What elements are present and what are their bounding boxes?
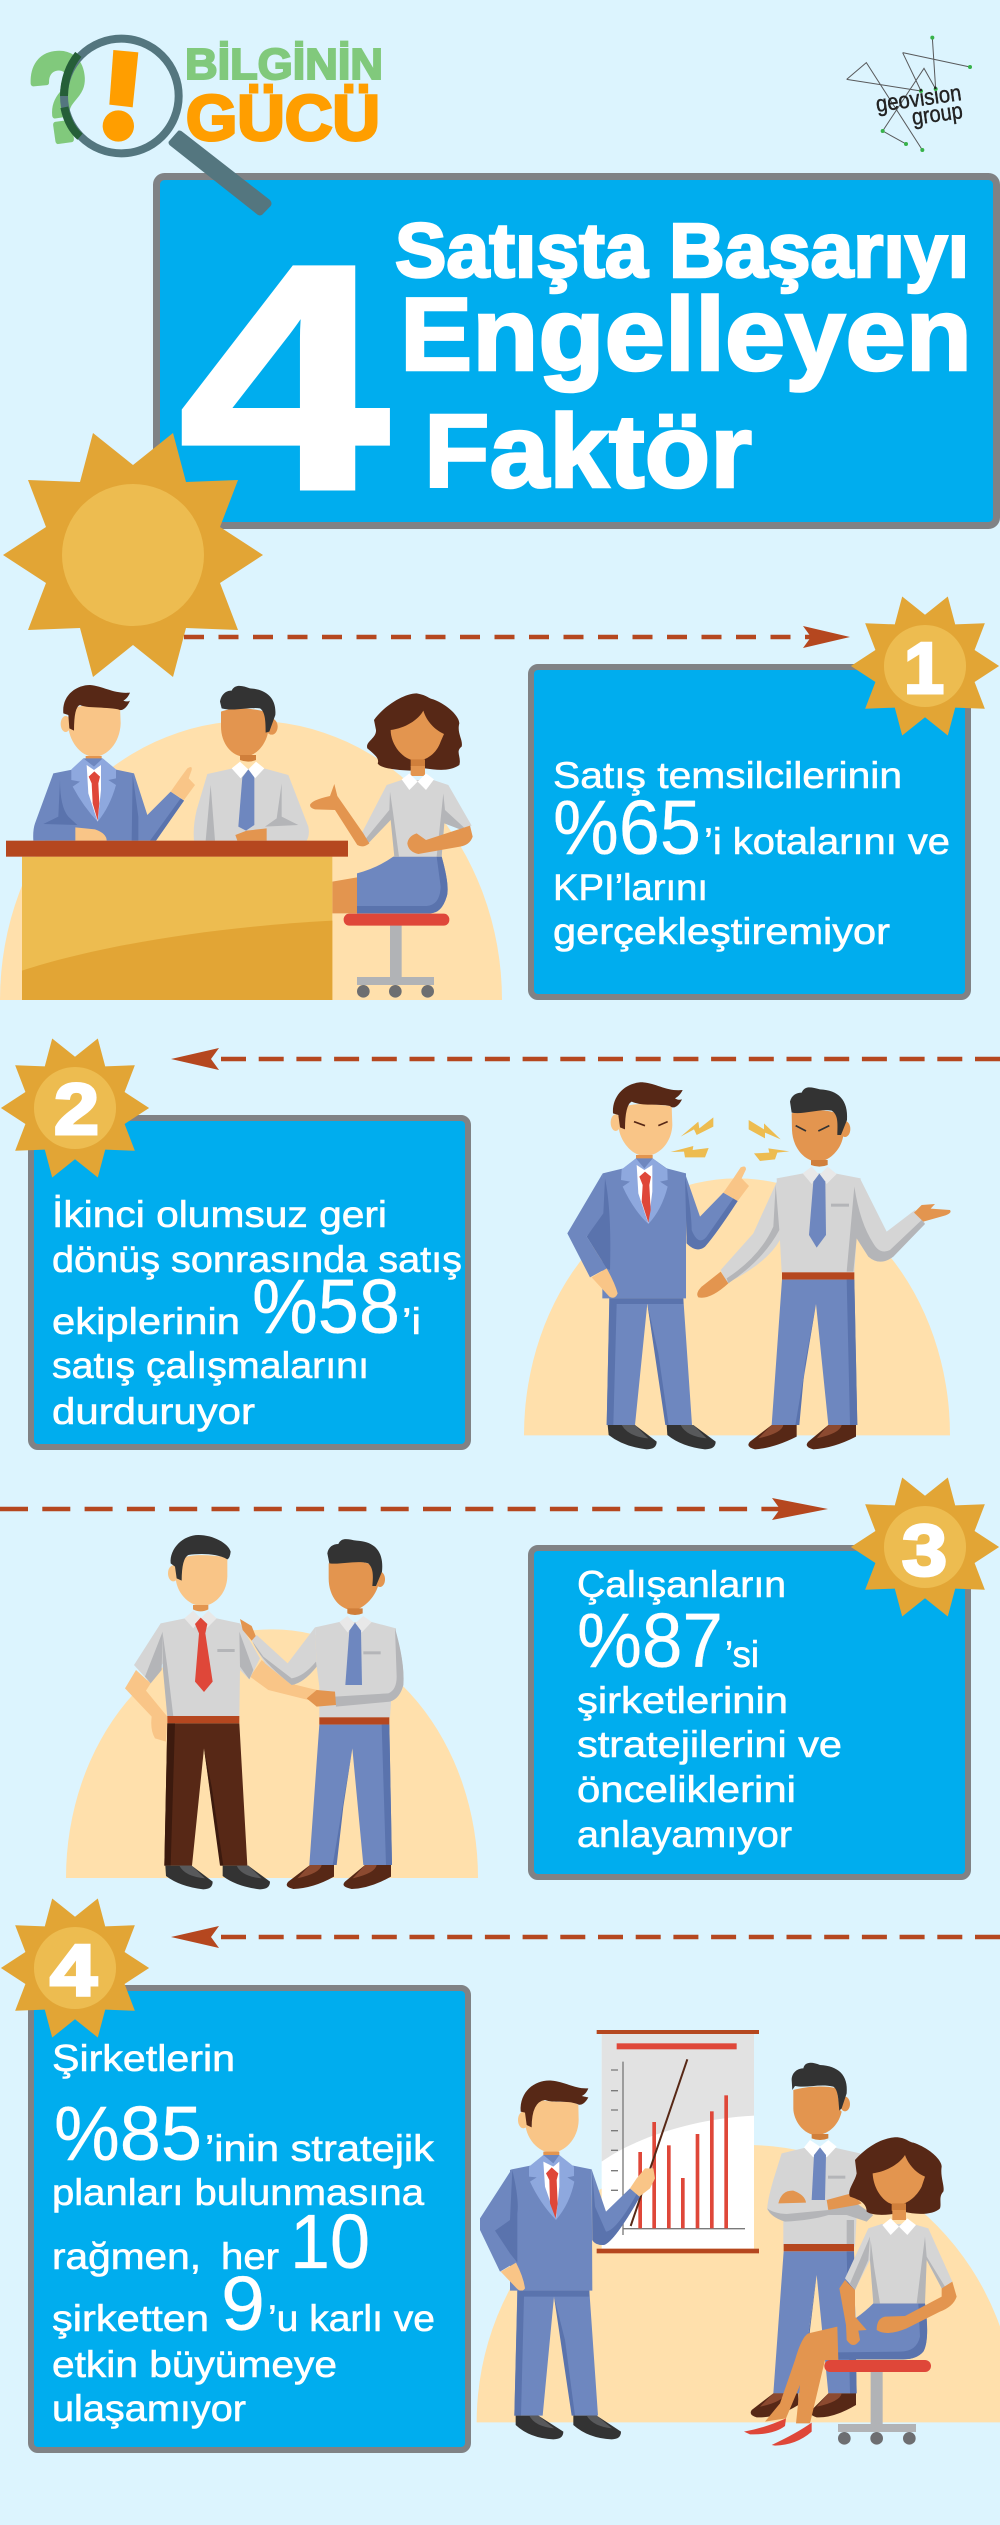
seated woman on stool xyxy=(744,2137,957,2446)
text: stat 4: ’inin stratejik xyxy=(205,2128,435,2169)
text: stat 1: KPI’larını xyxy=(553,867,708,908)
text: stat 2: durduruyor xyxy=(52,1391,255,1432)
logo word: Bilginin: BİLGİNİN xyxy=(185,40,383,89)
text: stat 2: ’i xyxy=(402,1301,421,1342)
badge 1: 1 xyxy=(904,629,944,709)
text: stat 4: her xyxy=(221,2236,279,2277)
badge 2 xyxy=(1,1038,149,1178)
card 4 xyxy=(31,1988,468,2450)
panel: stat 2 xyxy=(31,1118,468,1447)
text: stat 3: önceliklerini xyxy=(577,1769,796,1810)
arrow 4 xyxy=(171,1926,1000,1948)
title heading: Faktör xyxy=(424,394,752,510)
text: group: group xyxy=(910,97,964,130)
badge 3 xyxy=(851,1477,999,1617)
arrow 1 xyxy=(184,626,850,648)
desk xyxy=(6,841,348,1000)
card 2 xyxy=(31,1118,468,1447)
text: stat 2 xyxy=(52,1194,462,1432)
title heading: Engelleyen xyxy=(400,277,972,393)
badge 3: 3 xyxy=(902,1511,947,1591)
text: stat 2: dönüş sonrasında satış xyxy=(52,1239,462,1280)
title heading: Satışta Başarıyı xyxy=(395,208,969,294)
icon: anger sparks xyxy=(671,1117,789,1161)
badge 1 xyxy=(851,596,999,736)
text: stat 1: ’i kotalarını ve xyxy=(704,821,950,862)
card 3 xyxy=(531,1548,968,1877)
badge 4: 4 xyxy=(50,1931,97,2011)
icon: question mark: ? xyxy=(22,26,100,171)
text: stat 4: 9 xyxy=(221,2261,265,2347)
man with blue tie xyxy=(240,1539,404,1889)
peach backdrop xyxy=(477,2145,1000,2422)
text: stat 2: satış çalışmalarını xyxy=(52,1345,369,1386)
text: stat 3: anlayamıyor xyxy=(577,1814,792,1855)
illustration: meeting at desk xyxy=(0,685,502,1000)
text: stat 4: ’u karlı ve xyxy=(268,2298,435,2339)
badge 4 xyxy=(1,1898,149,2038)
text: stat 1 xyxy=(553,755,950,952)
man in blue suit xyxy=(567,1082,749,1449)
text: stat 2: ekiplerinin xyxy=(52,1301,240,1342)
icon: exclamation mark xyxy=(103,50,138,142)
man in blue suit xyxy=(33,685,195,841)
title heading xyxy=(395,208,972,510)
woman on stool xyxy=(310,693,473,998)
panel: stat 1 xyxy=(531,667,968,997)
text: stat 3: %87 xyxy=(577,1598,723,1684)
icon: magnifier xyxy=(64,39,272,216)
text: stat 4: planları bulunmasına xyxy=(52,2172,424,2213)
peach backdrop xyxy=(0,721,502,1000)
card 1 xyxy=(531,667,968,997)
logo word: Gücü: GÜCÜ xyxy=(186,82,380,154)
man with red tie xyxy=(125,1535,325,1889)
illustration: presentation with chart xyxy=(477,2030,1000,2446)
panel: title box xyxy=(156,176,996,526)
bar chart xyxy=(638,2095,728,2228)
illustration: colleagues shaking hands xyxy=(66,1535,478,1889)
text: stat 3: Çalışanların xyxy=(577,1564,786,1605)
text: stat 3: ’si xyxy=(725,1634,759,1675)
panel: stat 3 xyxy=(531,1548,968,1877)
text: stat 4: ulaşamıyor xyxy=(52,2388,246,2429)
text: stat 1: gerçekleştiremiyor xyxy=(553,911,890,952)
panel: stat 4 xyxy=(31,1988,468,2450)
text: stat 4: rağmen, xyxy=(52,2236,201,2277)
text: stat 4 xyxy=(52,2038,435,2429)
arrow 3 xyxy=(0,1498,828,1520)
peach backdrop xyxy=(66,1629,478,1878)
text: stat 4: 10 xyxy=(290,2199,370,2285)
presenter in blue suit xyxy=(480,2081,655,2439)
peach backdrop xyxy=(524,1178,950,1435)
man in gray shirt xyxy=(194,686,309,841)
text: stat 2: İkinci olumsuz geri xyxy=(52,1194,387,1235)
logo: geovision group xyxy=(847,36,972,152)
man with crossed arms xyxy=(751,2063,873,2417)
text: stat 4: şirketten xyxy=(52,2298,209,2339)
arrow 2 xyxy=(171,1048,1000,1070)
chart board xyxy=(597,2030,759,2253)
title: big number 4: 4 xyxy=(179,198,391,556)
text: stat 1: Satış temsilcilerinin xyxy=(553,755,902,796)
text: stat 3: şirketlerinin xyxy=(577,1680,788,1721)
text: stat 2: %58 xyxy=(252,1264,400,1350)
icon: big sun xyxy=(3,433,263,677)
text: stat 4: %85 xyxy=(54,2091,202,2177)
text: stat 4: Şirketlerin xyxy=(52,2038,235,2079)
illustration: arguing colleagues xyxy=(524,1082,951,1449)
logo: Bilginin Gücü xyxy=(22,26,383,216)
badge 2: 2 xyxy=(54,1070,99,1150)
text: stat 1: %65 xyxy=(553,785,701,871)
text: geovision: geovision xyxy=(874,79,963,117)
text: stat 3 xyxy=(577,1564,842,1855)
text: stat 3: stratejilerini ve xyxy=(577,1724,842,1765)
man in gray shirt xyxy=(697,1087,951,1449)
text: stat 4: etkin büyümeye xyxy=(52,2344,337,2385)
